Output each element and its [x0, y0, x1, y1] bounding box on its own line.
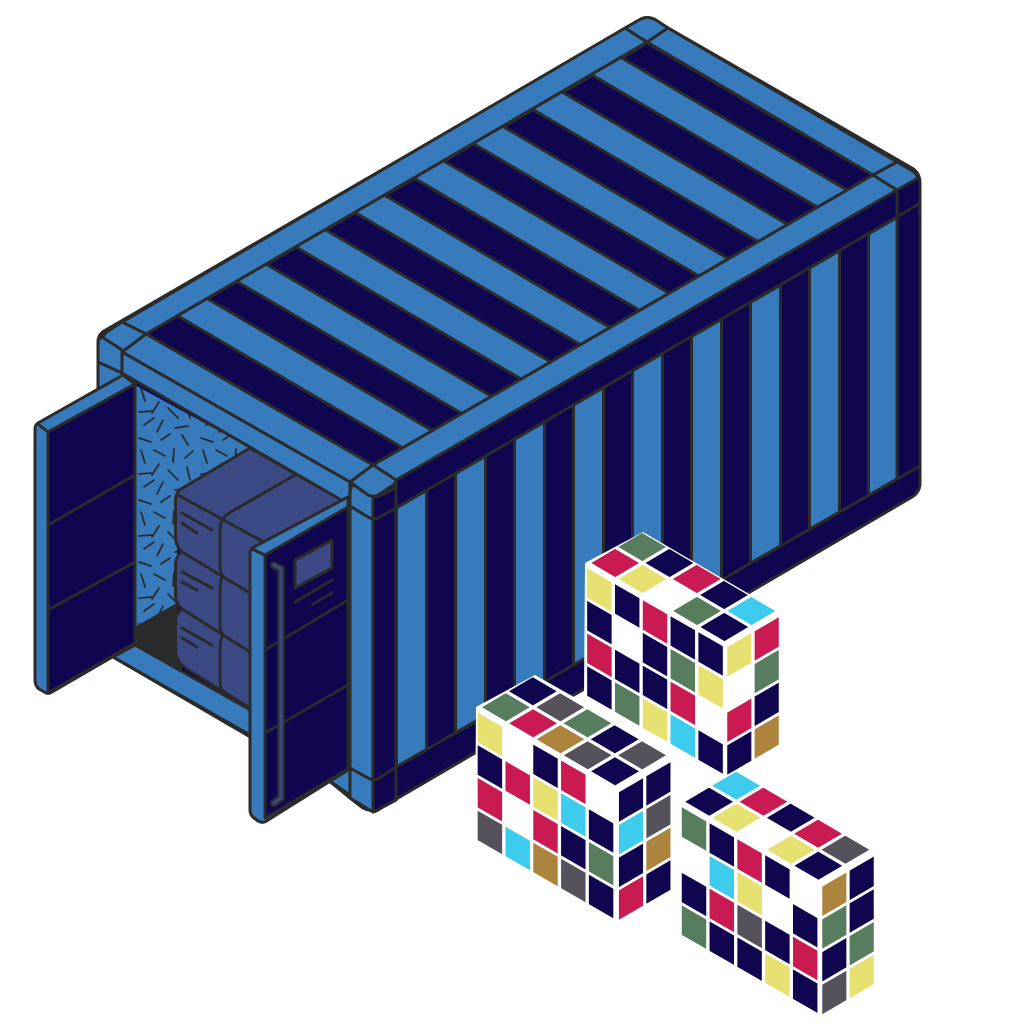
- top face: [685, 772, 869, 880]
- door label plate: [295, 540, 332, 588]
- box: lower left stack: [475, 675, 673, 920]
- roof strips: [146, 43, 873, 465]
- top face: [591, 533, 775, 641]
- left face: [587, 568, 723, 774]
- cargo bales: [176, 448, 350, 708]
- right face: [822, 857, 874, 1014]
- panel: open left door: [35, 375, 135, 693]
- panel: left rear post: [98, 337, 135, 402]
- panel: container roof: [102, 18, 918, 482]
- panel: door opening interior: [113, 385, 350, 736]
- floor: [135, 603, 182, 672]
- panel: container long side: [372, 190, 920, 800]
- right face: [727, 617, 779, 775]
- door handle: [274, 565, 281, 803]
- top face: [482, 677, 666, 785]
- bottom sill: [113, 645, 252, 736]
- left face: [478, 713, 613, 918]
- panel: top door frame: [98, 352, 350, 505]
- roof frame beams: [102, 18, 918, 482]
- roof base: [146, 42, 873, 465]
- side frame lines: [372, 190, 920, 800]
- side corrugation strips: [396, 217, 897, 767]
- box: lower right stack: [679, 771, 877, 1014]
- right face: [619, 762, 670, 920]
- box: top right stack: [584, 532, 781, 776]
- left face: [682, 807, 817, 1013]
- container silhouette: [98, 18, 920, 810]
- back wall with speckle pattern: [135, 385, 252, 627]
- door label lines: [295, 580, 332, 604]
- panel: closed right door: [250, 497, 350, 822]
- panel: front corner post: [350, 465, 396, 812]
